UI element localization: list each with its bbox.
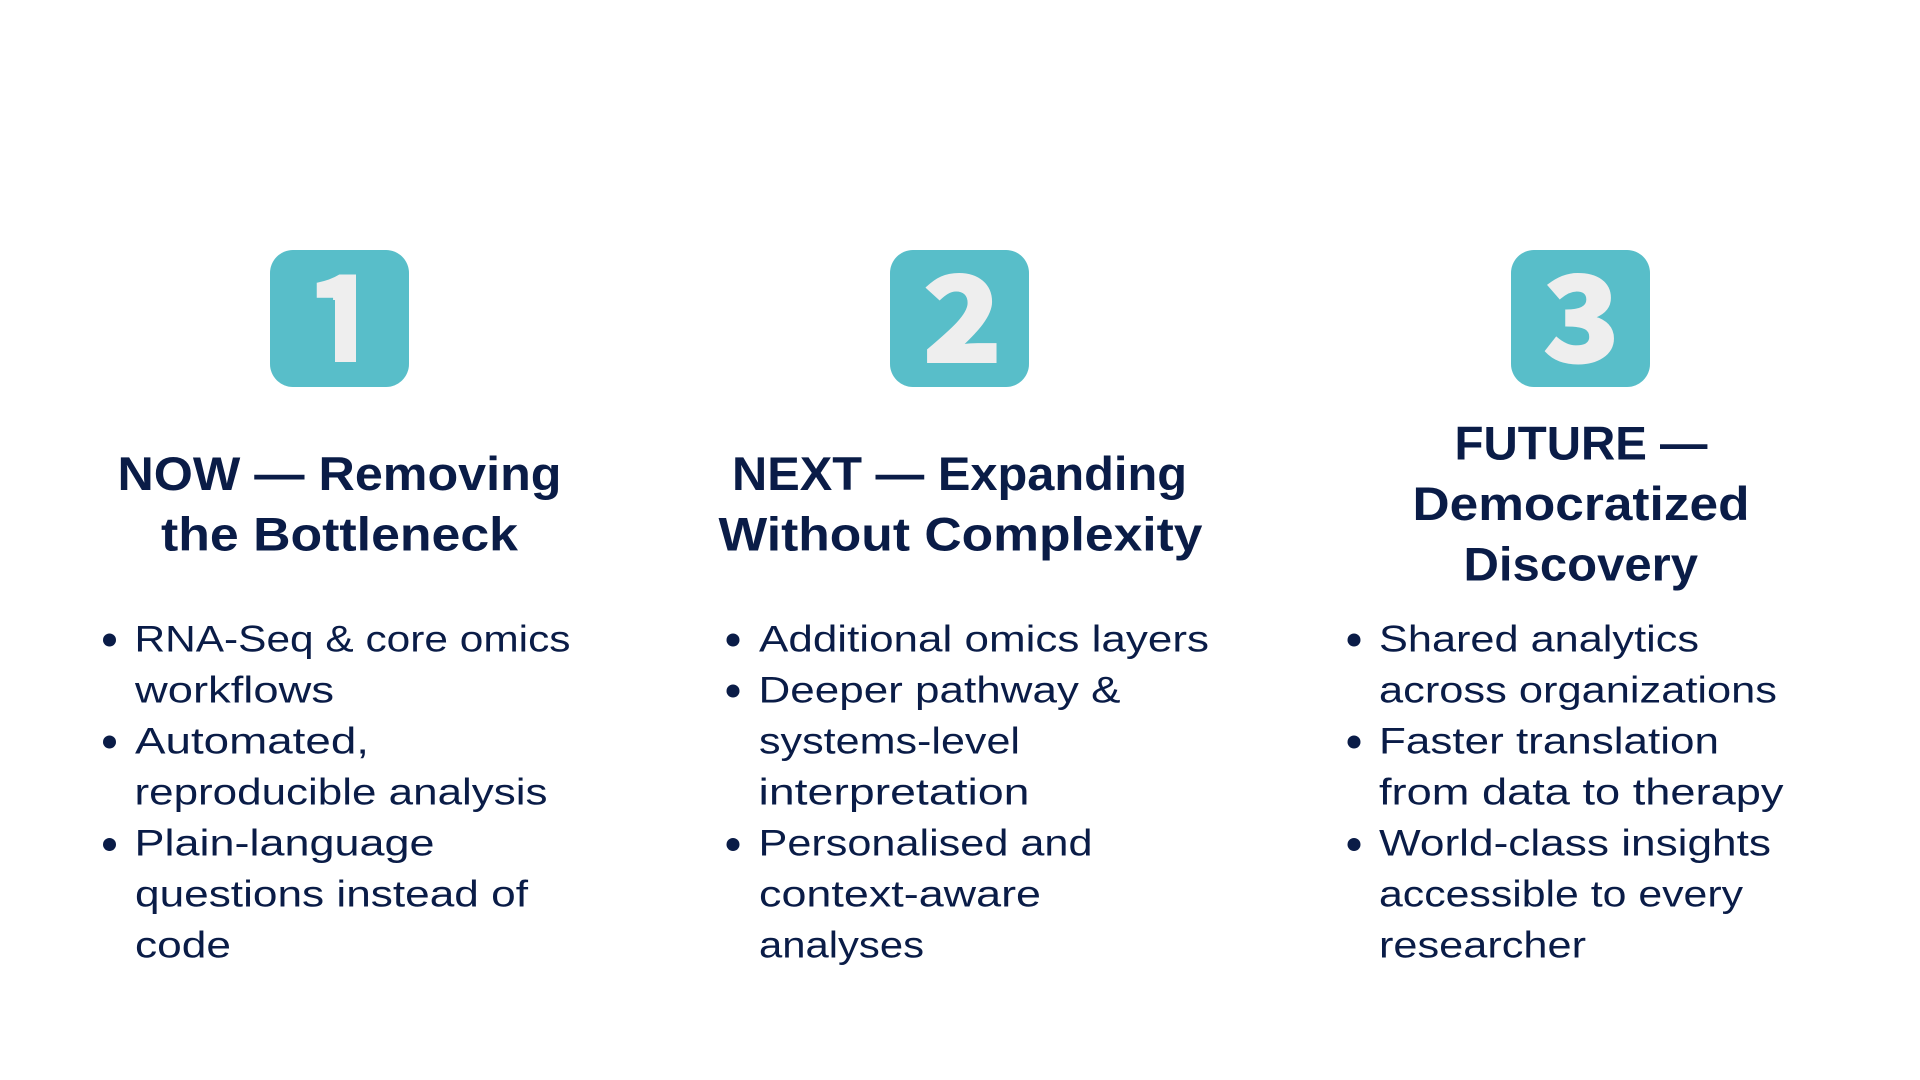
bullet list: FUTURE: across organizations <box>1379 668 1777 710</box>
bullet list: FUTURE: accessible to every <box>1379 872 1743 914</box>
heading: NOW: the Bottleneck <box>161 508 519 560</box>
bullet list: NOW: Automated, <box>135 720 369 762</box>
panel: NEXT column <box>718 224 1209 966</box>
bullet list: FUTURE <box>1348 618 1784 966</box>
bullet list: FUTURE: researcher <box>1379 924 1586 966</box>
bullet list: NEXT <box>726 618 1209 966</box>
bullet list: NEXT: analyses <box>759 924 924 966</box>
heading: NEXT: NEXT — Expanding <box>732 447 1187 500</box>
bullet list: NEXT: interpretation <box>758 770 1030 812</box>
badge: number 3 <box>1511 225 1650 397</box>
bullet list: NEXT: systems-level <box>759 720 1020 762</box>
badge: number 1 <box>270 250 409 387</box>
bullet list: NEXT: Personalised and <box>758 822 1092 864</box>
bullet list: NOW: RNA-Seq & core omics <box>134 618 570 660</box>
bullet list: NOW: reproducible analysis <box>134 770 548 812</box>
badge: number 1: 1 <box>306 225 378 397</box>
panel: FUTURE column <box>1348 225 1784 966</box>
heading: NEXT: Without Complexity <box>718 508 1202 560</box>
heading: NEXT <box>718 447 1202 560</box>
heading: NOW: NOW — Removing <box>118 447 562 500</box>
bullet list: FUTURE: Faster translation <box>1379 720 1719 762</box>
heading: FUTURE: FUTURE — <box>1454 416 1708 470</box>
bullet list: NOW: workflows <box>134 668 334 710</box>
bullet list: NEXT: Deeper pathway & <box>758 668 1120 710</box>
bullet list: NOW: questions instead of <box>135 872 529 914</box>
bullet list: NOW <box>103 618 570 966</box>
badge: number 2: 2 <box>923 224 1002 396</box>
bullet list: NOW: Plain-language <box>134 822 434 864</box>
heading: FUTURE: Discovery <box>1464 538 1698 590</box>
bullet list: FUTURE: World-class insights <box>1379 822 1771 864</box>
bullet list: FUTURE: Shared analytics <box>1379 618 1699 660</box>
bullet list: NEXT: context-aware <box>759 872 1041 914</box>
heading: NOW <box>118 447 562 560</box>
badge: number 2 <box>890 224 1029 396</box>
bullet list: NEXT: Additional omics layers <box>759 618 1209 660</box>
heading: FUTURE <box>1412 416 1750 590</box>
heading: FUTURE: Democratized <box>1412 477 1750 530</box>
bullet list: FUTURE: from data to therapy <box>1379 770 1784 812</box>
badge: number 3: 3 <box>1543 225 1620 397</box>
bullet list: NOW: code <box>135 924 231 966</box>
panel: NOW column <box>103 225 570 966</box>
